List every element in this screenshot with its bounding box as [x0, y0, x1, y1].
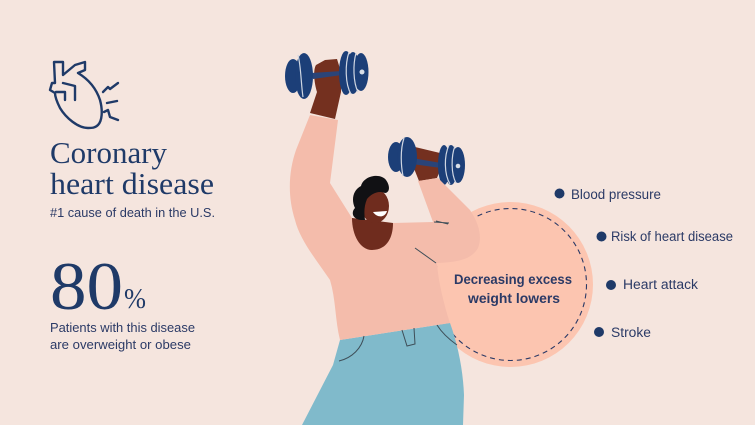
callout text: Decreasing excess: [454, 271, 572, 287]
hair: [353, 176, 389, 220]
statistic description: are overweight or obese: [50, 337, 191, 352]
right forearm and fist: [413, 147, 442, 181]
callout text: weight lowers: [467, 290, 560, 306]
list: stroke: Stroke: [611, 325, 651, 340]
icon: heart: [50, 62, 118, 128]
clothing lines: [339, 221, 457, 361]
callout text: [454, 271, 572, 306]
dumbbell: raised right: [388, 137, 465, 185]
list: risk of heart disease: Risk of heart disease: [611, 229, 733, 244]
title: [50, 135, 214, 201]
statistic: 80%: 80: [50, 248, 123, 324]
subtitle: #1 cause of death in the U.S.: [50, 205, 215, 220]
statistic: 80%: %: [124, 284, 146, 315]
smile: [373, 211, 387, 216]
pants: [302, 323, 464, 425]
sweater: [290, 115, 480, 340]
left forearm and fist: [310, 59, 341, 119]
statistic description: [50, 320, 195, 352]
title: heart disease: [50, 166, 214, 201]
list: blood pressure: Blood pressure: [571, 187, 661, 202]
dumbbell: raised left: [285, 51, 368, 99]
neck and chest: [352, 218, 393, 250]
head: [361, 189, 389, 223]
statistic description: Patients with this disease: [50, 320, 195, 335]
list: stroke: [594, 325, 651, 340]
list: heart attack: Heart attack: [623, 277, 698, 292]
figure: person lifting dumbbells: [285, 51, 480, 425]
title: Coronary: [50, 135, 167, 170]
callout circle: [428, 202, 593, 367]
